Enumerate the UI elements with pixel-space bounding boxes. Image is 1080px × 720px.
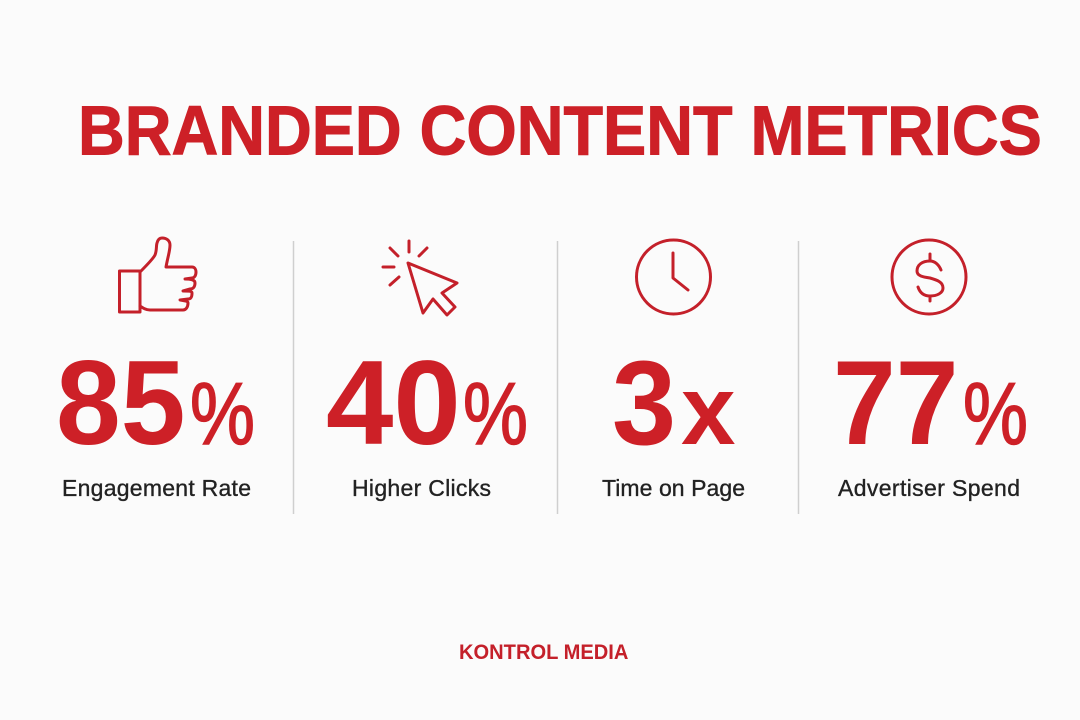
value: 3x bbox=[612, 336, 736, 470]
value: 40%: 40 bbox=[326, 336, 461, 470]
label: time on page: Time on Page bbox=[602, 475, 745, 501]
metric: time on page bbox=[602, 240, 745, 501]
metric: higher clicks: % bbox=[463, 366, 528, 464]
metric: advertiser spend bbox=[833, 240, 1028, 501]
icon: thumbs up bbox=[120, 238, 196, 312]
value: 77%: 77 bbox=[833, 336, 958, 470]
metric: higher clicks bbox=[326, 241, 528, 501]
metric: advertiser spend: % bbox=[963, 366, 1028, 464]
title: BRANDED CONTENT METRICS bbox=[78, 92, 1042, 170]
icon: dollar coin bbox=[892, 240, 966, 314]
footer brand: KONTROL MEDIA bbox=[459, 641, 629, 664]
metric: engagement rate bbox=[56, 238, 255, 501]
metric: engagement rate: % bbox=[190, 366, 255, 464]
label: higher clicks: Higher Clicks bbox=[352, 475, 491, 501]
label: advertiser spend: Advertiser Spend bbox=[838, 475, 1020, 501]
value: 3x: x bbox=[681, 355, 736, 465]
value: 3x: 3 bbox=[612, 336, 676, 470]
label: engagement rate: Engagement Rate bbox=[62, 475, 251, 501]
value: 85%: 85 bbox=[56, 336, 185, 470]
icon: clock bbox=[636, 240, 710, 314]
icon: cursor click bbox=[383, 241, 457, 315]
